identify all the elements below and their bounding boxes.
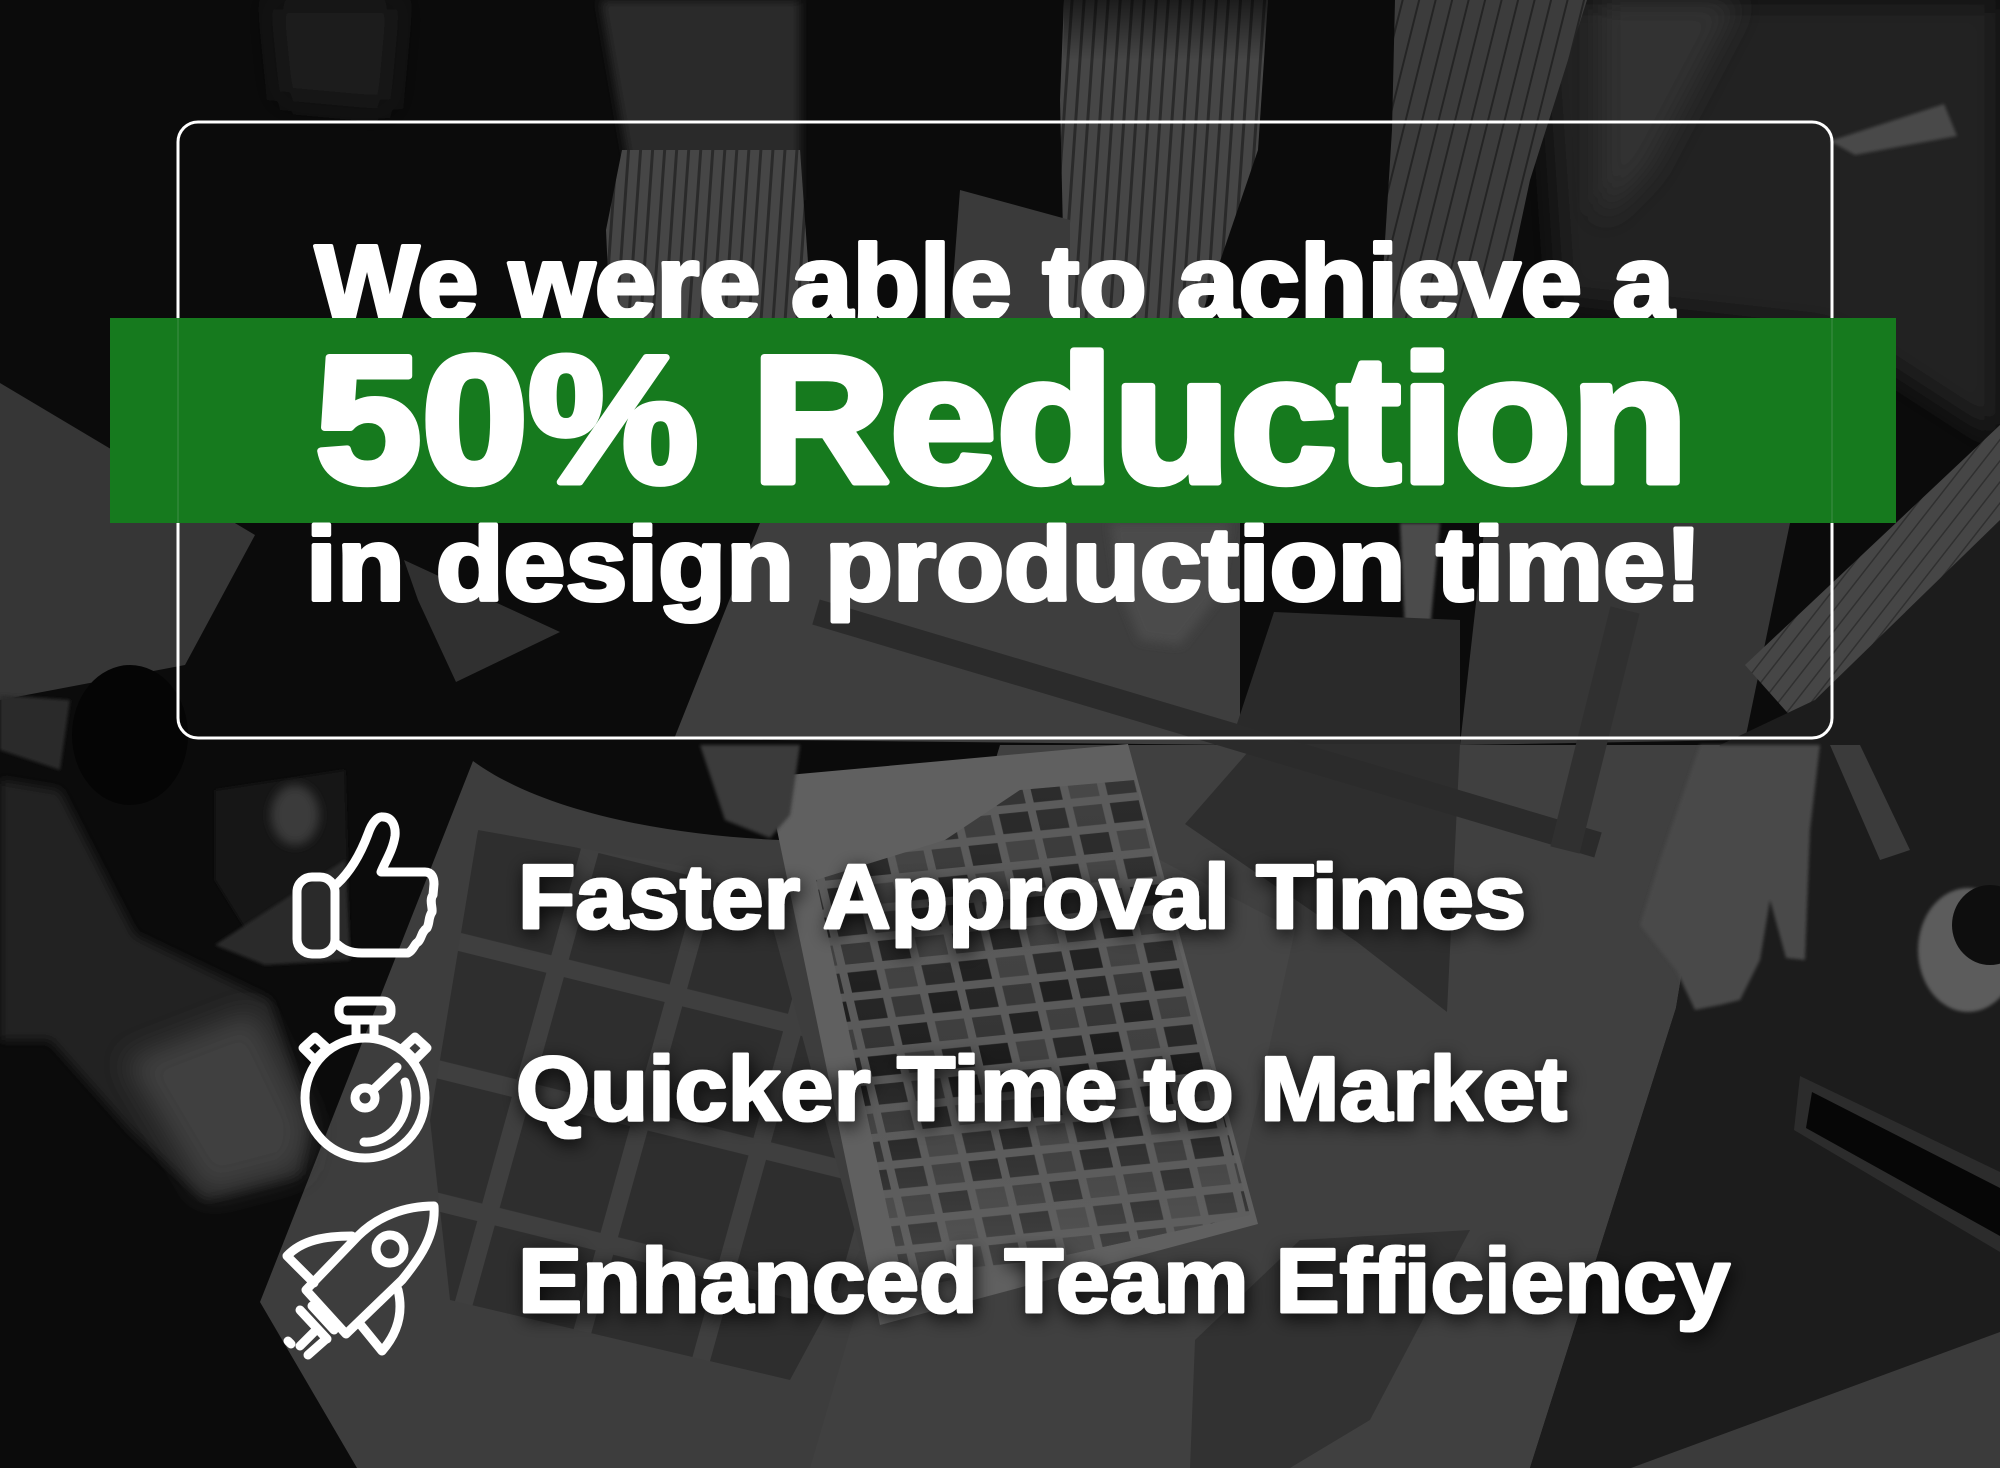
background: light garment edge [1830, 104, 1957, 155]
background: tattooed arm [0, 780, 310, 1200]
background: lower zone sheet [1190, 1230, 1470, 1468]
background: hands over paper [1110, 523, 1230, 645]
background: swatch cells on left sheet [430, 830, 860, 1380]
background: pen bulb [271, 785, 319, 845]
background: sticky note [404, 560, 560, 682]
green highlight band [110, 318, 1896, 523]
background: pen tips [1400, 523, 1440, 630]
background: swatch grid [816, 780, 1250, 1290]
background: tablet on table [1794, 1076, 2000, 1252]
background: swatch card [766, 744, 1258, 1325]
background: spiral notebook [0, 695, 70, 770]
background: pale drafting sheet [1130, 860, 1295, 1180]
background: small hand on card [700, 745, 800, 838]
background: mesh cup [215, 860, 350, 965]
heading line 3: in design production time! [306, 507, 1702, 623]
rounded outline box [178, 122, 1832, 738]
background: left swatch sheet [260, 761, 880, 1468]
background: big right sheet [780, 745, 1720, 1468]
background: black mug [72, 665, 188, 805]
background: upright ruler [1565, 610, 1625, 850]
background: sleeve shade [1062, 0, 1268, 120]
background: plant pot [1918, 888, 2000, 1012]
background: right arm [1745, 425, 2000, 755]
background: hair strands [1600, 0, 1740, 220]
faint box line across band [177, 318, 179, 523]
background: right hand [1640, 745, 1820, 1010]
background: dark upper left fabric [270, 0, 400, 110]
background: left notebook [0, 383, 255, 700]
icon: stopwatch [303, 1001, 427, 1158]
background: pen holder [215, 770, 350, 960]
background: zone sheet dark band [1185, 744, 1460, 1012]
background: plant in pot [1952, 885, 2000, 965]
background: paper under sleeves [950, 190, 1070, 320]
background: tablet screen [1806, 1092, 2000, 1236]
heading line 1: We were able to achieve a [315, 224, 1675, 342]
list item: Faster Approval Times: Faster Approval Times [518, 847, 1526, 948]
headline: 50% Reduction: 50% Reduction [315, 319, 1688, 521]
background: center-left sleeve [606, 150, 812, 318]
icon: rocket [287, 1206, 434, 1355]
background: swatch grid fade [816, 780, 1250, 1290]
background: right ribbed sleeve [1380, 0, 1587, 320]
background: upper right dark clothing [1540, 0, 2000, 440]
list item: Enhanced Team Efficiency: Enhanced Team Efficiency [518, 1231, 1730, 1332]
faint box line across band right [1831, 318, 1833, 523]
background: dark zone sheet upper [1230, 612, 1460, 745]
background: folding rule [1830, 745, 1910, 860]
icon: thumbs up [297, 817, 434, 954]
background: hand highlight [125, 1010, 310, 1195]
background: long ruler [816, 612, 1598, 845]
list item: Quicker Time to Market: Quicker Time to Market [516, 1039, 1567, 1140]
background: grey fabric left of sleeve [600, 0, 800, 230]
background: central sheet below band [674, 523, 1240, 745]
background: right sheet below band [1460, 523, 1790, 745]
background: lower right pale corner [1631, 1332, 2000, 1468]
background: center-right sleeve [1060, 0, 1268, 320]
background: lower right dark table [1530, 520, 2000, 1468]
